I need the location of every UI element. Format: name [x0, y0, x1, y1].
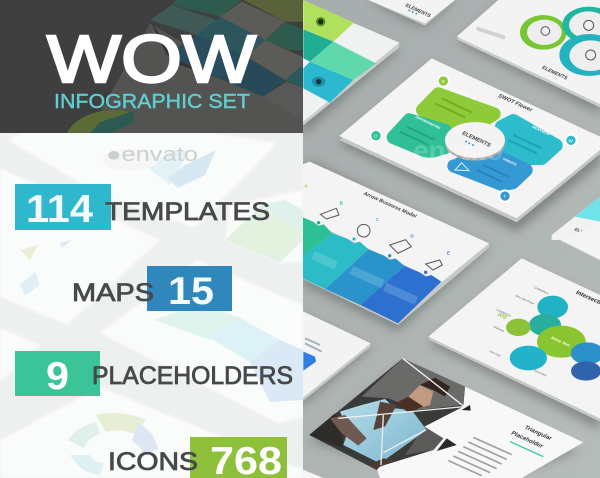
petal: opportunities: OPPORTUNITIES	[414, 115, 442, 130]
slide: triangular placeholder: Placeholder	[509, 431, 545, 450]
venn circles: Some Text	[550, 335, 572, 348]
slide: intersection	[428, 258, 600, 430]
petal: opportunities	[369, 115, 445, 151]
stat: 114 templates: TEMPLATES	[105, 198, 270, 226]
panel: light left background with faded slides	[0, 0, 337, 478]
icon: cyan gear	[559, 34, 600, 76]
stat: 9 placeholders: PLACEHOLDERS	[92, 362, 293, 390]
slide: arrow business model	[301, 162, 489, 332]
stat: 9 placeholders	[15, 351, 293, 398]
heading: SWOT Flower: SWOT Flower	[496, 93, 534, 114]
labels: letters: E	[447, 250, 450, 255]
icon: teal gear	[562, 6, 600, 38]
slide: colour blocks	[300, 0, 399, 132]
venn labels: Competitors	[533, 285, 550, 295]
icon: outline icons	[320, 208, 442, 270]
venn labels: Zero-day	[488, 349, 502, 358]
slide: small cyan card: ELEMENTS	[573, 227, 599, 241]
venn labels	[488, 285, 550, 377]
subtitle: Infographic Set: INFOGRAPHIC SET	[54, 91, 250, 113]
panel copy	[313, 255, 416, 301]
venn labels: Malware	[493, 325, 506, 333]
markers	[317, 221, 427, 274]
slide: small cyan card	[552, 197, 600, 241]
petal: weakness	[502, 121, 578, 158]
heading: Triangular Placeholder: Triangular	[523, 425, 553, 442]
petal: weakness: WEAKNESS	[531, 125, 551, 137]
labels: letters: A	[304, 184, 308, 189]
panel: green	[301, 217, 332, 258]
heading: Arrow Business Model: Arrow Business Model	[362, 191, 418, 220]
petal: weakness: W	[568, 138, 573, 143]
slide: rectangle process edge	[300, 310, 372, 408]
venn labels: JOS	[495, 312, 509, 321]
watermark: envato: ●envato	[106, 144, 198, 166]
slide: top logo card: ELEMENTS	[404, 3, 432, 19]
panel: dark blue	[360, 266, 441, 323]
petal: threats	[454, 156, 526, 203]
slide: top logo card	[368, 0, 455, 28]
slide: top right corner	[560, 230, 600, 260]
slide: bottom left corner	[303, 470, 323, 478]
petal: threats: THREATS	[501, 157, 518, 167]
venn labels: Structured	[533, 368, 548, 377]
labels: letters	[304, 184, 450, 255]
stat: icons 768	[108, 437, 287, 478]
slide: gears: ELEMENTS	[540, 65, 569, 82]
petal: strengths: STRENGTHS	[453, 88, 477, 101]
venn circles	[506, 296, 600, 381]
panel: mid blue	[325, 249, 405, 305]
slide: SWOT flower	[339, 58, 600, 232]
centre badge: ELEMENTS	[460, 131, 492, 149]
body text lines	[448, 437, 512, 476]
centre badge	[445, 122, 505, 161]
photo: bearded man	[309, 358, 465, 470]
panel: dark title banner	[0, 0, 337, 133]
watermark: envato right: envato	[413, 135, 503, 166]
slide: triangular placeholder	[309, 358, 583, 478]
stat: icons 768: ICONS	[108, 448, 198, 476]
photo: white triangle lines	[338, 358, 464, 465]
stat: maps 15	[72, 266, 232, 313]
dark triangles	[462, 405, 471, 411]
petal: strengths: S	[442, 79, 445, 84]
stat: 9 placeholders: 9	[46, 355, 69, 398]
venn labels: Competitors	[495, 308, 512, 318]
petal: threats: T	[503, 194, 506, 199]
white page	[377, 387, 583, 478]
panel: teal	[301, 233, 369, 289]
icon: lime gear	[520, 15, 567, 50]
stat: maps 15: 15	[168, 270, 214, 313]
petal: opportunities: O	[374, 134, 378, 139]
venn labels: Zero-day threat	[514, 294, 535, 305]
labels: letters: B	[340, 200, 344, 205]
stat: 114 templates	[15, 184, 270, 231]
labels: letters: D	[410, 233, 414, 238]
panel: isometric slides mockup	[300, 0, 600, 478]
faded chart: rings and petals	[20, 149, 303, 475]
petal: strengths	[423, 74, 494, 123]
slide: gears	[457, 0, 600, 115]
title: WOW: WOW	[47, 22, 257, 97]
stat: 114 templates: 114	[26, 188, 93, 231]
labels: letters: C	[376, 217, 380, 222]
stat: maps 15: MAPS	[72, 279, 154, 307]
